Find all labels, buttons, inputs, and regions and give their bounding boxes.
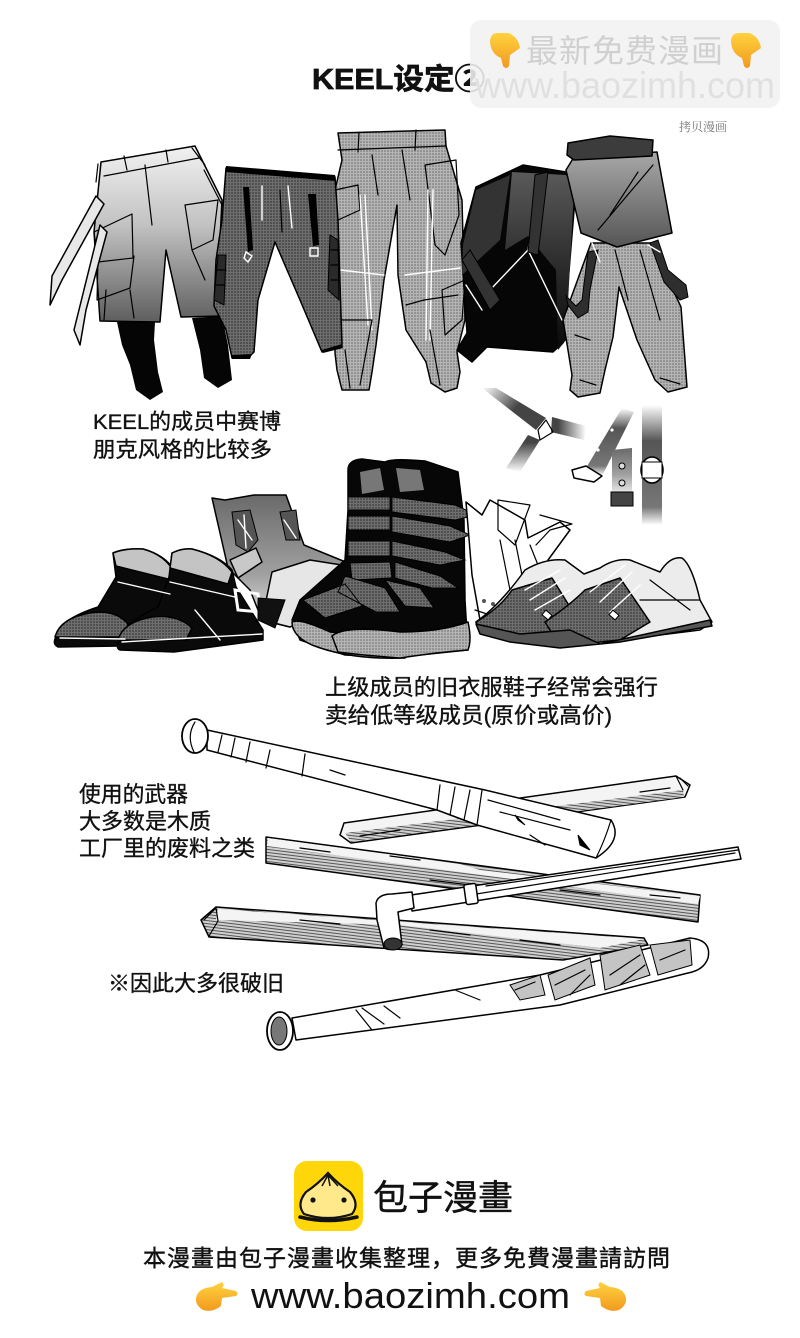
shoes: black buckled boots xyxy=(54,549,285,652)
caption: cyberpunk style: KEEL的成员中赛博 xyxy=(93,410,281,434)
strap: long with ring xyxy=(641,405,663,525)
strap: cut end xyxy=(611,448,633,506)
shoes: tall strapped boots xyxy=(292,459,477,658)
caption: weapons: 使用的武器 xyxy=(79,782,188,807)
url: www.baozimh.com xyxy=(250,1275,570,1316)
strap: D-ring buckle xyxy=(572,408,634,482)
promo line: 本漫畫由包子漫畫收集整理，更多免費漫畫請訪問 xyxy=(143,1245,670,1271)
pants 3: light gray cargo trousers xyxy=(335,130,465,392)
caption: cyberpunk style: 朋克风格的比较多 xyxy=(93,438,272,462)
plank: middle xyxy=(266,837,700,922)
watermark banner xyxy=(470,20,780,108)
caption: hand-me-downs xyxy=(325,675,658,728)
watermark headline: 最新免费漫画 xyxy=(526,33,723,69)
icon: pointing hand right xyxy=(584,1282,626,1311)
harness straps and buckles xyxy=(482,388,663,525)
pants 1: gradient cargo shorts with black leggings xyxy=(50,146,232,400)
plank: lower xyxy=(201,907,648,960)
strap: Y harness xyxy=(482,388,586,472)
icon: pointing-down hand left xyxy=(490,33,520,68)
caption: cyberpunk style xyxy=(93,410,281,462)
footer promo xyxy=(143,1161,670,1316)
plank: upper right xyxy=(340,776,690,843)
brand name: 包子漫畫 xyxy=(373,1179,513,1218)
caption: weapons: 大多数是木质 xyxy=(79,809,211,834)
pants 2: dark zipped trousers xyxy=(214,166,343,359)
icon: pointing-down hand right xyxy=(731,33,761,68)
weapons illustration xyxy=(182,719,741,1050)
caption: hand-me-downs: 卖给低等级成员(原价或高价) xyxy=(325,703,612,728)
icon: bun logo xyxy=(294,1161,363,1231)
shoes: white high-tops xyxy=(466,500,572,620)
bat: painted lower bat xyxy=(267,938,709,1050)
suspender straps xyxy=(566,250,598,318)
caption: weapons: 工厂里的废料之类 xyxy=(79,836,255,861)
source mark: 拷贝漫画 xyxy=(679,119,727,134)
caption: weapons xyxy=(79,782,255,861)
pants 4: folded black trousers xyxy=(457,165,576,362)
pants row illustration xyxy=(50,130,688,400)
shoes: gray low sneakers xyxy=(476,558,712,648)
caption: hand-me-downs: 上级成员的旧衣服鞋子经常会强行 xyxy=(325,675,658,700)
title: KEEL设定② xyxy=(312,63,485,96)
boot soles xyxy=(292,621,409,658)
icon: pointing hand left xyxy=(196,1282,238,1311)
shoes: gray lace-up boots xyxy=(212,495,350,627)
bat: taped upper bat xyxy=(182,719,615,858)
boot straps xyxy=(303,497,477,618)
footwear row illustration xyxy=(54,459,712,658)
caption: worn note: ※因此大多很破旧 xyxy=(108,971,284,996)
watermark url: www.baozimh.com xyxy=(474,65,775,106)
ribbon straps xyxy=(50,196,107,345)
buckle xyxy=(235,590,260,612)
pants 5: apron trousers with suspenders xyxy=(563,136,688,397)
pipe: L-shaped wrench xyxy=(376,847,741,950)
